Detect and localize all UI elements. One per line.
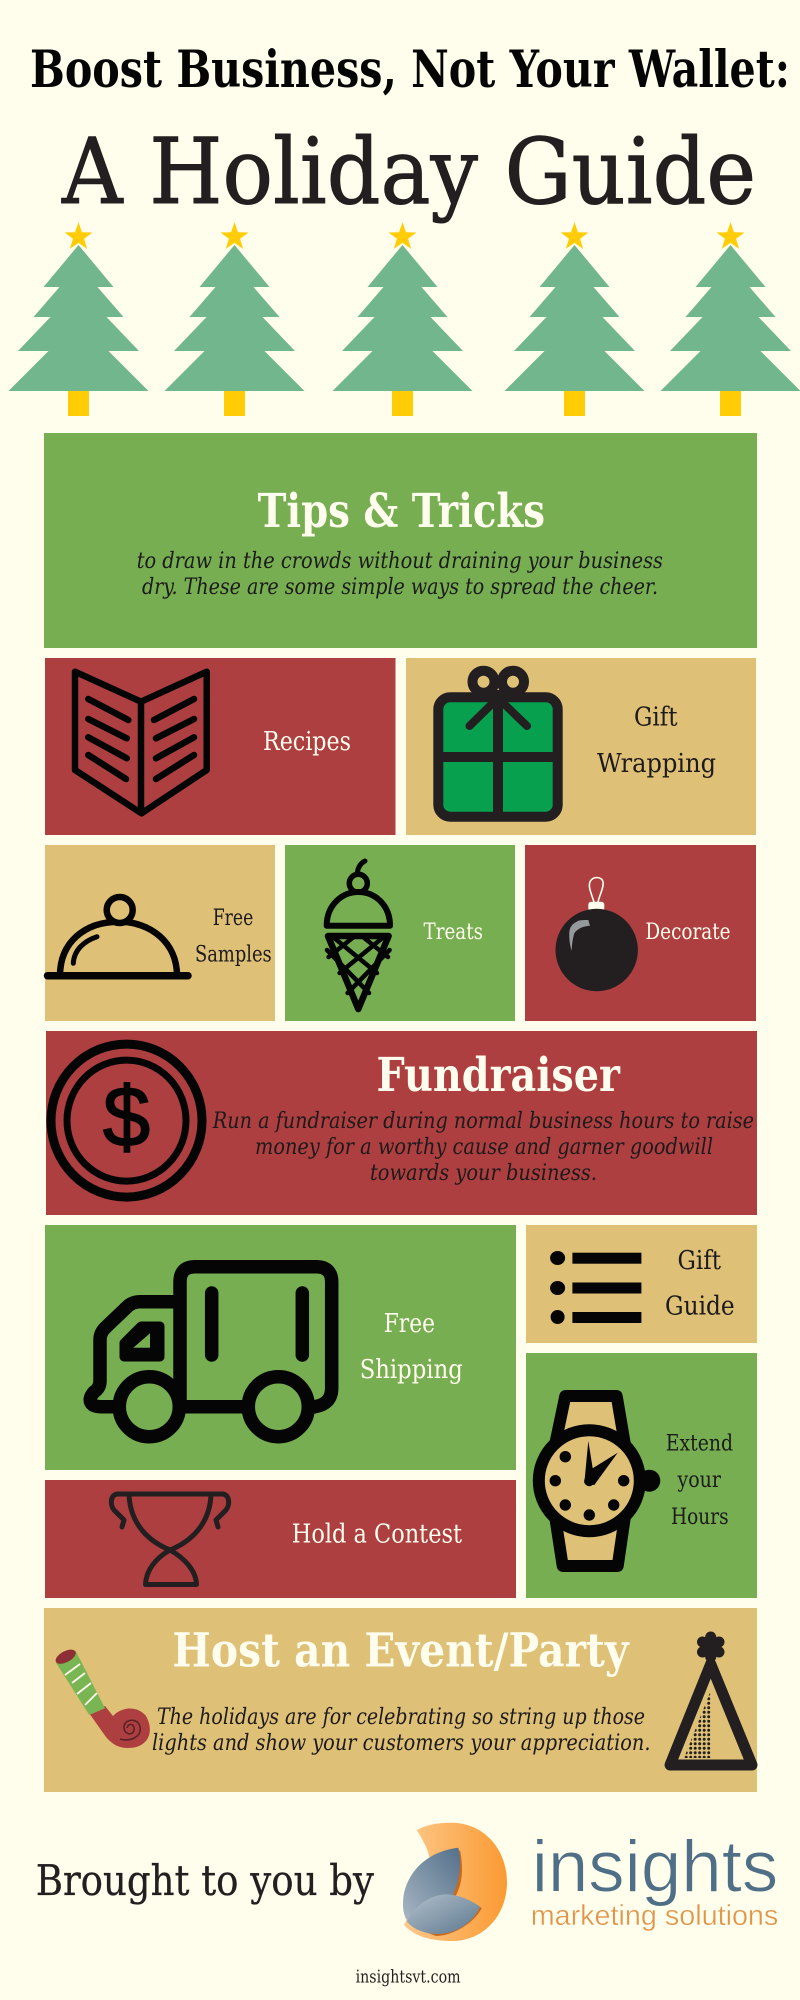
heading: Tips & Tricks: Tips & Tricks xyxy=(258,484,545,539)
panel: free samples xyxy=(45,845,275,1021)
text: fundraiser body: towards your business. xyxy=(370,1161,597,1186)
label: Gift Wrapping: Wrapping xyxy=(597,749,716,779)
row of christmas trees xyxy=(8,222,800,416)
panel: fundraiser xyxy=(46,1031,757,1215)
label: Gift Wrapping: Gift xyxy=(634,703,678,733)
label: Free Samples: Free xyxy=(213,906,253,931)
text: Brought to you by: Brought to you by xyxy=(36,1856,374,1905)
tree 3 xyxy=(332,222,472,416)
label: Free Shipping: Shipping xyxy=(360,1355,463,1385)
panel: host an event xyxy=(44,1608,757,1792)
panel: free shipping xyxy=(45,1225,516,1470)
icon: party hat xyxy=(670,1632,752,1765)
label: Recipes: Recipes xyxy=(263,727,351,757)
label: Free Samples xyxy=(195,906,272,968)
panel: gift wrapping xyxy=(406,658,756,835)
icon: trophy xyxy=(111,1494,229,1584)
panel: extend your hours xyxy=(526,1353,757,1598)
text: tips intro: to draw in the crowds without draining your business xyxy=(137,549,663,574)
label: Free Shipping: Free xyxy=(384,1309,435,1339)
icon: gift box xyxy=(438,671,558,817)
logo mark xyxy=(403,1823,507,1941)
text: fundraiser body: money for a worthy cause and garner goodwill xyxy=(255,1135,713,1160)
icon: dollar coin xyxy=(51,1044,202,1197)
panel: hold a contest xyxy=(45,1480,516,1598)
label: Treats: Treats xyxy=(424,920,483,945)
icon: ice cream cone xyxy=(327,861,390,1009)
logo wordmark: insights xyxy=(532,1827,778,1908)
text: fundraiser body xyxy=(212,1109,754,1186)
label: Gift Guide: Guide xyxy=(665,1292,735,1322)
heading: Host an Event/Party: Host an Event/Party xyxy=(172,1624,630,1679)
label: Extend your Hours: your xyxy=(677,1468,721,1493)
label: Extend your Hours xyxy=(666,1432,733,1530)
panel: recipes xyxy=(45,658,396,835)
text: tips intro: dry. These are some simple ways to spread the cheer. xyxy=(142,575,658,600)
logo: insights marketing solutions xyxy=(403,1823,778,1941)
panel: treats xyxy=(285,845,515,1021)
text: event body: The holidays are for celebrating so string up those xyxy=(157,1705,645,1730)
icon: ornament bauble xyxy=(556,878,638,991)
panel: decorate xyxy=(525,845,756,1021)
logo tagline: marketing solutions xyxy=(531,1900,778,1932)
icon: party blower xyxy=(53,1647,150,1748)
tree 5 xyxy=(660,222,800,416)
label: Free Shipping xyxy=(360,1309,463,1385)
icon: wristwatch xyxy=(539,1396,660,1566)
icon: delivery truck xyxy=(90,1267,332,1437)
text: tips intro xyxy=(137,549,663,600)
label: Gift Guide xyxy=(665,1246,735,1322)
label: Decorate: Decorate xyxy=(645,920,731,945)
label: Gift Guide: Gift xyxy=(678,1246,721,1276)
panel: gift guide xyxy=(526,1225,757,1343)
icon: open book xyxy=(75,672,207,813)
tree 2 xyxy=(164,222,304,416)
text: event body: lights and show your customers your appreciation. xyxy=(152,1731,650,1756)
label: Gift Wrapping xyxy=(597,703,716,779)
text: website: insightsvt.com xyxy=(356,1967,461,1988)
icon: dollar coin: $ xyxy=(103,1070,150,1165)
panel: tips and tricks xyxy=(44,433,757,648)
tree 4 xyxy=(504,222,644,416)
icon: serving cloche xyxy=(48,897,188,976)
label: Extend your Hours: Extend xyxy=(666,1432,733,1456)
tree 1 xyxy=(8,222,148,416)
title: A Holiday Guide: A Holiday Guide xyxy=(61,120,756,225)
icon: checklist xyxy=(550,1251,641,1324)
text: event body xyxy=(152,1705,650,1756)
label: Hold a Contest: Hold a Contest xyxy=(292,1519,462,1549)
label: Free Samples: Samples xyxy=(195,943,272,968)
heading: Fundraiser: Fundraiser xyxy=(376,1048,621,1103)
label: Extend your Hours: Hours xyxy=(671,1505,729,1530)
